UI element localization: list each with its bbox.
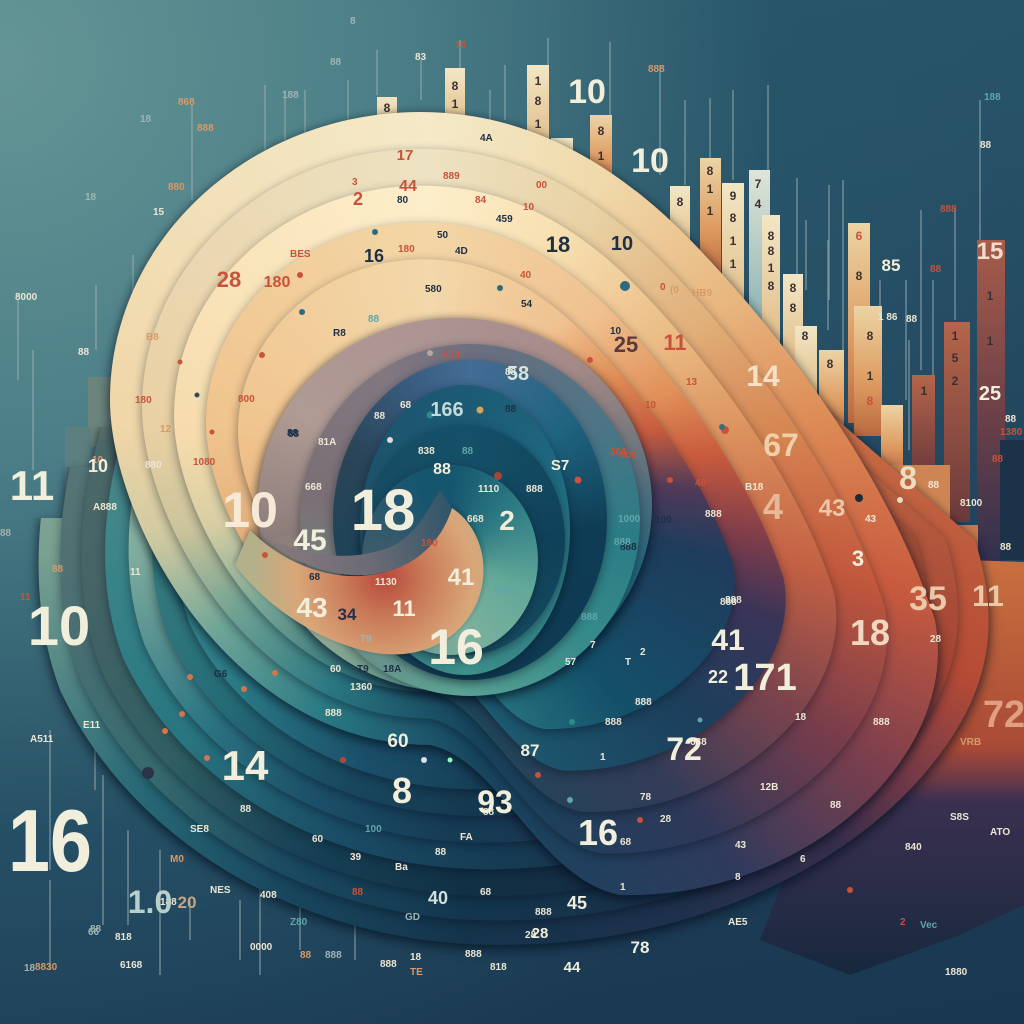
large numbers: 41 [711, 624, 745, 657]
labels on the spiral top: 180 [135, 395, 152, 406]
mauve band [249, 312, 658, 696]
labels on the lower bands: 60 [312, 834, 324, 845]
characters printed on the bars: 8 [677, 195, 684, 209]
labels on the lower bands: S8S [950, 812, 969, 823]
characters printed on the bars: 8 [535, 94, 542, 108]
large numbers: 18 [850, 612, 890, 653]
labels in the core: 88 [288, 429, 300, 440]
characters printed on the bars [384, 74, 994, 408]
labels on the lower bands: 60 [330, 664, 342, 675]
labels on the lower bands: 2 [900, 917, 906, 928]
labels on the spiral top: 800 [238, 394, 255, 405]
band 4 [101, 454, 560, 873]
labels on the spiral top: T9 [360, 634, 372, 645]
characters printed on the bars: 8 [827, 357, 834, 371]
labels on the lower bands: FA [460, 832, 473, 843]
labels in the core: 888 [581, 612, 598, 623]
band 5 [124, 500, 538, 848]
large numbers: 10 [88, 456, 108, 476]
labels on the lower bands: NES [210, 885, 231, 896]
large numbers: 85 [882, 256, 900, 275]
labels on the spiral top: 800 [620, 450, 637, 461]
labels on the lower bands: 6 [800, 854, 806, 865]
characters printed on the bars: 1 [707, 204, 714, 218]
labels in the core: 838 [418, 446, 435, 457]
labels on the lower bands: 66 [88, 927, 100, 938]
labels on the spiral top: 888 [620, 542, 637, 553]
labels on the spiral top: (0 [670, 285, 679, 296]
large numbers: 10 [611, 233, 633, 255]
large numbers: 11 [972, 580, 1004, 613]
labels on the lower bands: 888 [725, 595, 742, 606]
large numbers: 10 [28, 594, 90, 657]
labels in the core: 888 [526, 484, 543, 495]
labels in the core: 1000 [618, 514, 641, 525]
large numbers: 15 [977, 238, 1003, 265]
spiral: upper cream rings [102, 108, 946, 904]
large numbers: 11 [10, 462, 54, 509]
labels on the lower bands: 888 [605, 717, 622, 728]
labels on the spiral top: R8 [333, 328, 346, 339]
large numbers: 171 [733, 657, 797, 699]
labels on the spiral top: 4A [480, 133, 493, 144]
labels on the dark background: 11 [20, 592, 31, 603]
large numbers: 2 [499, 505, 515, 536]
labels on the spiral top: 48 [695, 478, 707, 489]
labels on the dark background: 88 [906, 314, 918, 325]
band 6 [146, 544, 517, 821]
labels on the lower bands: 408 [260, 890, 277, 901]
labels on the spiral top: 28 [930, 634, 942, 645]
large numbers: 41 [448, 564, 474, 591]
labels on the dark background: 18 [140, 114, 152, 125]
labels on the lower bands: 78 [640, 792, 652, 803]
labels on the lower bands: GD [405, 912, 420, 923]
band 1 [31, 399, 998, 954]
labels on the lower bands: 1 [600, 752, 606, 763]
teal lobe [361, 464, 540, 662]
labels on the lower bands: 8830 [35, 962, 58, 973]
labels on the lower bands: 188 [160, 897, 177, 908]
large numbers: 10 [222, 482, 278, 538]
labels in the core: 88 [505, 404, 517, 415]
labels on the lower bands: ATO [990, 827, 1010, 838]
labels on the spiral top: 880 [145, 460, 162, 471]
labels on the lower bands: VRB [960, 737, 981, 748]
large numbers: 43 [819, 495, 845, 522]
large numbers: 16 [8, 791, 92, 890]
labels on the spiral top: BES [290, 249, 311, 260]
labels on the lower bands: M0 [170, 854, 184, 865]
large numbers: 11 [392, 596, 416, 621]
large numbers: 45 [567, 893, 587, 913]
labels on the lower bands: 1880 [945, 967, 968, 978]
large numbers: 25 [979, 383, 1001, 405]
large numbers: 3 [852, 546, 864, 571]
characters printed on the bars: 8 [790, 281, 797, 295]
large numbers: 10 [631, 142, 669, 180]
band 2 [54, 461, 964, 925]
labels in the core [288, 350, 641, 668]
large numbers: 60 [387, 731, 409, 752]
large numbers: 58 [507, 363, 529, 385]
labels on the dark background: 888 [648, 64, 665, 75]
characters printed on the bars: 1 [535, 74, 542, 88]
large numbers: 72 [666, 731, 702, 767]
labels on the lower bands: 68 [620, 837, 632, 848]
labels on the spiral top: 54 [521, 299, 533, 310]
large numbers: 28 [532, 925, 548, 942]
labels in the core: 368 [610, 447, 627, 458]
labels on the lower bands: 18 [24, 963, 36, 974]
large numbers: 20 [178, 893, 196, 912]
labels on the dark background: 88 [930, 264, 942, 275]
large numbers: 1.0 [128, 884, 172, 920]
cream ring 1 [102, 108, 946, 904]
labels on the spiral top: 10 [523, 202, 535, 213]
large numbers: 18 [351, 478, 415, 543]
large numbers: 43 [296, 592, 328, 623]
labels on the spiral top: 1080 [193, 457, 216, 468]
labels on the spiral top: 8 [370, 579, 376, 590]
labels on the dark background: 18 [455, 40, 467, 51]
labels on the spiral top: 0 [660, 282, 666, 293]
labels in the core: 1110 [478, 484, 500, 495]
skyline bars [65, 65, 1024, 645]
labels in the core: 88 [462, 446, 474, 457]
large numbers: 8 [392, 770, 412, 811]
labels on the lower bands: 88 [435, 847, 447, 858]
large numbers: 11 [663, 330, 687, 355]
labels on the lower bands: T9 [357, 664, 369, 675]
labels on the spiral top: 889 [443, 171, 460, 182]
dark blue band [328, 358, 612, 688]
large numbers: 166 [430, 399, 464, 421]
characters printed on the bars: 6 [856, 229, 863, 243]
characters printed on the bars: 1 [452, 97, 459, 111]
labels on the dark background: 88 [78, 347, 90, 358]
characters printed on the bars: 1 [707, 182, 714, 196]
labels on the spiral top: HB9 [692, 288, 712, 299]
characters printed on the bars: 8 [452, 79, 459, 93]
large numbers: 28 [217, 267, 241, 292]
characters printed on the bars: 1 [768, 261, 775, 275]
large numbers: 2 [353, 189, 363, 209]
large numbers: S7 [551, 457, 569, 474]
characters printed on the bars: 1 [730, 257, 737, 271]
labels on the dark background: 888 [940, 204, 957, 215]
large numbers: 93 [477, 784, 513, 820]
labels on the lower bands: E11 [83, 720, 101, 731]
band 3 [77, 426, 933, 900]
labels on the dark background: 11 [130, 567, 141, 578]
labels on the lower bands: 43 [735, 840, 747, 851]
labels on the spiral top: 88 [287, 428, 299, 439]
steel and teal band [294, 341, 644, 706]
labels on the dark background: 868 [178, 97, 195, 108]
characters printed on the bars: 8 [707, 164, 714, 178]
labels on the dark background: 8100 [960, 498, 983, 509]
large numbers: 72 [983, 694, 1024, 736]
labels on the lower bands: 68 [480, 887, 492, 898]
labels on the dark background: 15 [153, 207, 165, 218]
characters printed on the bars: 7 [755, 177, 762, 191]
labels on the lower bands: 888 [635, 697, 652, 708]
labels on the lower bands: AE5 [728, 917, 748, 928]
large numbers: 87 [521, 741, 539, 760]
characters printed on the bars: 8 [768, 229, 775, 243]
labels on the lower bands: 688 [690, 737, 707, 748]
large numbers: 14 [746, 360, 780, 393]
labels on the spiral top: 580 [425, 284, 442, 295]
labels on the dark background: 18 [85, 192, 97, 203]
characters printed on the bars: 1 [730, 234, 737, 248]
cream ring 3 [167, 182, 842, 818]
labels on the spiral top: 81A [318, 437, 336, 448]
labels on the lower bands: Ba [395, 862, 408, 873]
labels on the dark background: 880 [168, 182, 185, 193]
labels on the lower bands: 88 [90, 924, 102, 935]
labels on the spiral top: 4D [455, 246, 468, 257]
labels on the spiral top: 40 [520, 270, 532, 281]
labels on the spiral top: 88 [368, 314, 380, 325]
labels on the lower bands: 88 [830, 800, 842, 811]
bottom right mass [760, 560, 1024, 975]
labels on the spiral top: 888 [705, 509, 722, 520]
labels on the lower bands: Vec [920, 920, 938, 931]
labels on the dark background: 1380 [1000, 427, 1023, 438]
labels on the lower bands: 1 [620, 882, 626, 893]
labels on the dark background: 88 [52, 564, 64, 575]
labels on the lower bands: 88 [352, 887, 364, 898]
labels on the dark background: 8000 [15, 292, 38, 303]
peach ring 4 [199, 218, 792, 776]
labels on the lower bands: 818 [490, 962, 507, 973]
large numbers: 180 [264, 274, 290, 291]
labels on the lower bands: 0000 [250, 942, 273, 953]
labels on the lower bands: Z80 [290, 917, 308, 928]
labels on the lower bands: 88 [483, 807, 495, 818]
labels on the lower bands: 12B [760, 782, 778, 793]
large numbers: 44 [399, 178, 417, 195]
characters printed on the bars: 4 [755, 197, 762, 211]
labels on the lower bands: SE8 [190, 824, 209, 835]
labels on the lower bands: 39 [350, 852, 362, 863]
labels on the spiral top: 459 [496, 214, 513, 225]
mauve tail [262, 490, 452, 575]
labels on the lower bands: 2 [640, 647, 646, 658]
characters printed on the bars: 8 [730, 211, 737, 225]
labels on the lower bands: 18 [410, 952, 422, 963]
labels in the core: 57 [565, 657, 577, 668]
large numbers: 44 [564, 959, 581, 976]
characters printed on the bars: 1 [987, 334, 994, 348]
labels on the spiral top: 10 [610, 326, 622, 337]
labels on the spiral top: 3 [352, 177, 358, 188]
labels on the dark background: 188 [984, 92, 1001, 103]
large numbers: 4 [763, 486, 783, 527]
labels on the dark background: 88 [1000, 542, 1012, 553]
large numbers: 88 [433, 461, 451, 478]
large numbers: 18 [546, 232, 570, 257]
labels on the spiral top: B18 [745, 482, 764, 493]
large numbers: 25 [614, 332, 638, 357]
characters printed on the bars: 8 [790, 301, 797, 315]
cream ring 2 [135, 145, 894, 860]
labels on the spiral top: B8 [146, 332, 159, 343]
labels on the spiral top: 668 [305, 482, 322, 493]
characters printed on the bars: 8 [768, 244, 775, 258]
large numbers: 34 [338, 605, 357, 624]
characters printed on the bars: 1 [535, 117, 542, 131]
characters printed on the bars: 1 [987, 289, 994, 303]
labels on the spiral top: 10 [92, 455, 104, 466]
labels in the core: 888 [614, 537, 631, 548]
labels on the lower bands: 88 [240, 804, 252, 815]
large numbers: 22 [708, 667, 728, 687]
labels on the spiral top [92, 133, 942, 645]
labels in the core: 60S [494, 585, 512, 596]
labels on the spiral top: 1130 [375, 577, 397, 588]
labels on the lower bands: 888 [380, 959, 397, 970]
labels in the core: 88 [374, 411, 386, 422]
spiral: inner swirl core [249, 312, 658, 706]
peach ring 5 [231, 256, 738, 736]
labels on the spiral top: 80 [397, 195, 409, 206]
labels in the core: 68 [400, 400, 412, 411]
large numbers: 78 [631, 938, 649, 957]
labels on the lower bands: 88 [300, 950, 312, 961]
characters printed on the bars: 5 [952, 351, 959, 365]
large numbers: 10 [568, 73, 606, 111]
dark inner band [362, 424, 570, 663]
labels on the dark background: 88 [330, 57, 342, 68]
characters printed on the bars: 8 [802, 329, 809, 343]
labels on the lower bands: 818 [115, 932, 132, 943]
labels on the lower bands: 8 [735, 872, 741, 883]
labels in the core: 88 [505, 367, 517, 378]
characters printed on the bars: 8 [598, 124, 605, 138]
characters printed on the bars: 1 [598, 149, 605, 163]
characters printed on the bars: 8 [768, 279, 775, 293]
labels on the lower bands: TE [410, 967, 423, 978]
labels in the core: T [625, 657, 631, 668]
labels on the dark background: 1 86 [878, 312, 898, 323]
large numbers: 8 [899, 460, 917, 496]
labels on the spiral top: 12 [160, 424, 172, 435]
labels on the spiral top: 84 [475, 195, 487, 206]
labels on the lower bands [24, 595, 1010, 978]
labels in the core: 180 [421, 538, 438, 549]
labels on the dark background: 8 [350, 16, 356, 27]
band 7 [178, 596, 492, 794]
labels on the spiral top: 10 [645, 400, 657, 411]
labels on the dark background: 88 [0, 528, 12, 539]
labels on the lower bands: 1360 [350, 682, 373, 693]
large numbers: 35 [909, 580, 947, 618]
labels on the lower bands: 840 [905, 842, 922, 853]
labels on the lower bands: 888 [465, 949, 482, 960]
labels on the dark background: 188 [282, 90, 299, 101]
labels on the lower bands: 888 [325, 950, 342, 961]
large numbers: 40 [428, 888, 448, 908]
labels on the lower bands: 100 [365, 824, 382, 835]
spiral: outer lower bands [31, 399, 998, 954]
labels on the lower bands: 18 [795, 712, 807, 723]
labels on the lower bands: G6 [214, 669, 228, 680]
labels on the lower bands: 6168 [120, 960, 143, 971]
characters printed on the bars: 1 [952, 329, 959, 343]
large numbers: 67 [763, 427, 799, 463]
labels on the spiral top: 180 [398, 244, 415, 255]
labels on the lower bands: A511 [30, 734, 54, 745]
large numbers: 16 [364, 246, 384, 266]
labels on the lower bands: 888 [873, 717, 890, 728]
characters printed on the bars: 2 [952, 374, 959, 388]
labels on the lower bands: 28 [525, 930, 537, 941]
labels on the spiral top: 888 [720, 597, 737, 608]
labels on the spiral top: 88 [928, 480, 940, 491]
labels on the dark background: 88 [992, 454, 1004, 465]
labels in the core: 7 [590, 640, 596, 651]
characters printed on the bars: 8 [867, 329, 874, 343]
labels on the lower bands: 888 [535, 907, 552, 918]
labels on the lower bands: 28 [660, 814, 672, 825]
labels on the dark background: 83 [415, 52, 427, 63]
large numbers: 45 [293, 524, 327, 557]
coloured dots [142, 229, 903, 893]
characters printed on the bars: 8 [384, 101, 391, 115]
labels on the dark background: 88 [1005, 414, 1017, 425]
labels on the spiral top: 50 [437, 230, 449, 241]
labels on the spiral top: 43 [865, 514, 877, 525]
large numbers: 16 [428, 619, 484, 675]
characters printed on the bars: 8 [867, 394, 874, 408]
characters printed on the bars: 9 [730, 189, 737, 203]
labels on the spiral top: 00 [536, 180, 548, 191]
labels on the dark background: A888 [93, 502, 117, 513]
labels in the core: S10 [442, 350, 460, 361]
characters printed on the bars: 8 [856, 269, 863, 283]
labels in the core: 668 [467, 514, 484, 525]
labels on the dark background [0, 16, 1023, 603]
labels on the spiral top: 13 [686, 377, 698, 388]
labels on the lower bands: 888 [325, 708, 342, 719]
teal band [358, 383, 572, 683]
labels on the dark background: 888 [197, 123, 214, 134]
large numbers: 14 [222, 742, 269, 789]
peach arm [235, 508, 484, 654]
labels on the lower bands: 18A [383, 664, 401, 675]
characters printed on the bars: 1 [921, 384, 928, 398]
large numbers: 17 [397, 147, 413, 164]
labels on the spiral top: 100 [655, 515, 672, 526]
labels on the spiral top: 68 [309, 572, 321, 583]
large numbers: 16 [578, 812, 618, 853]
characters printed on the bars: 1 [867, 369, 874, 383]
labels on the dark background: 88 [980, 140, 992, 151]
